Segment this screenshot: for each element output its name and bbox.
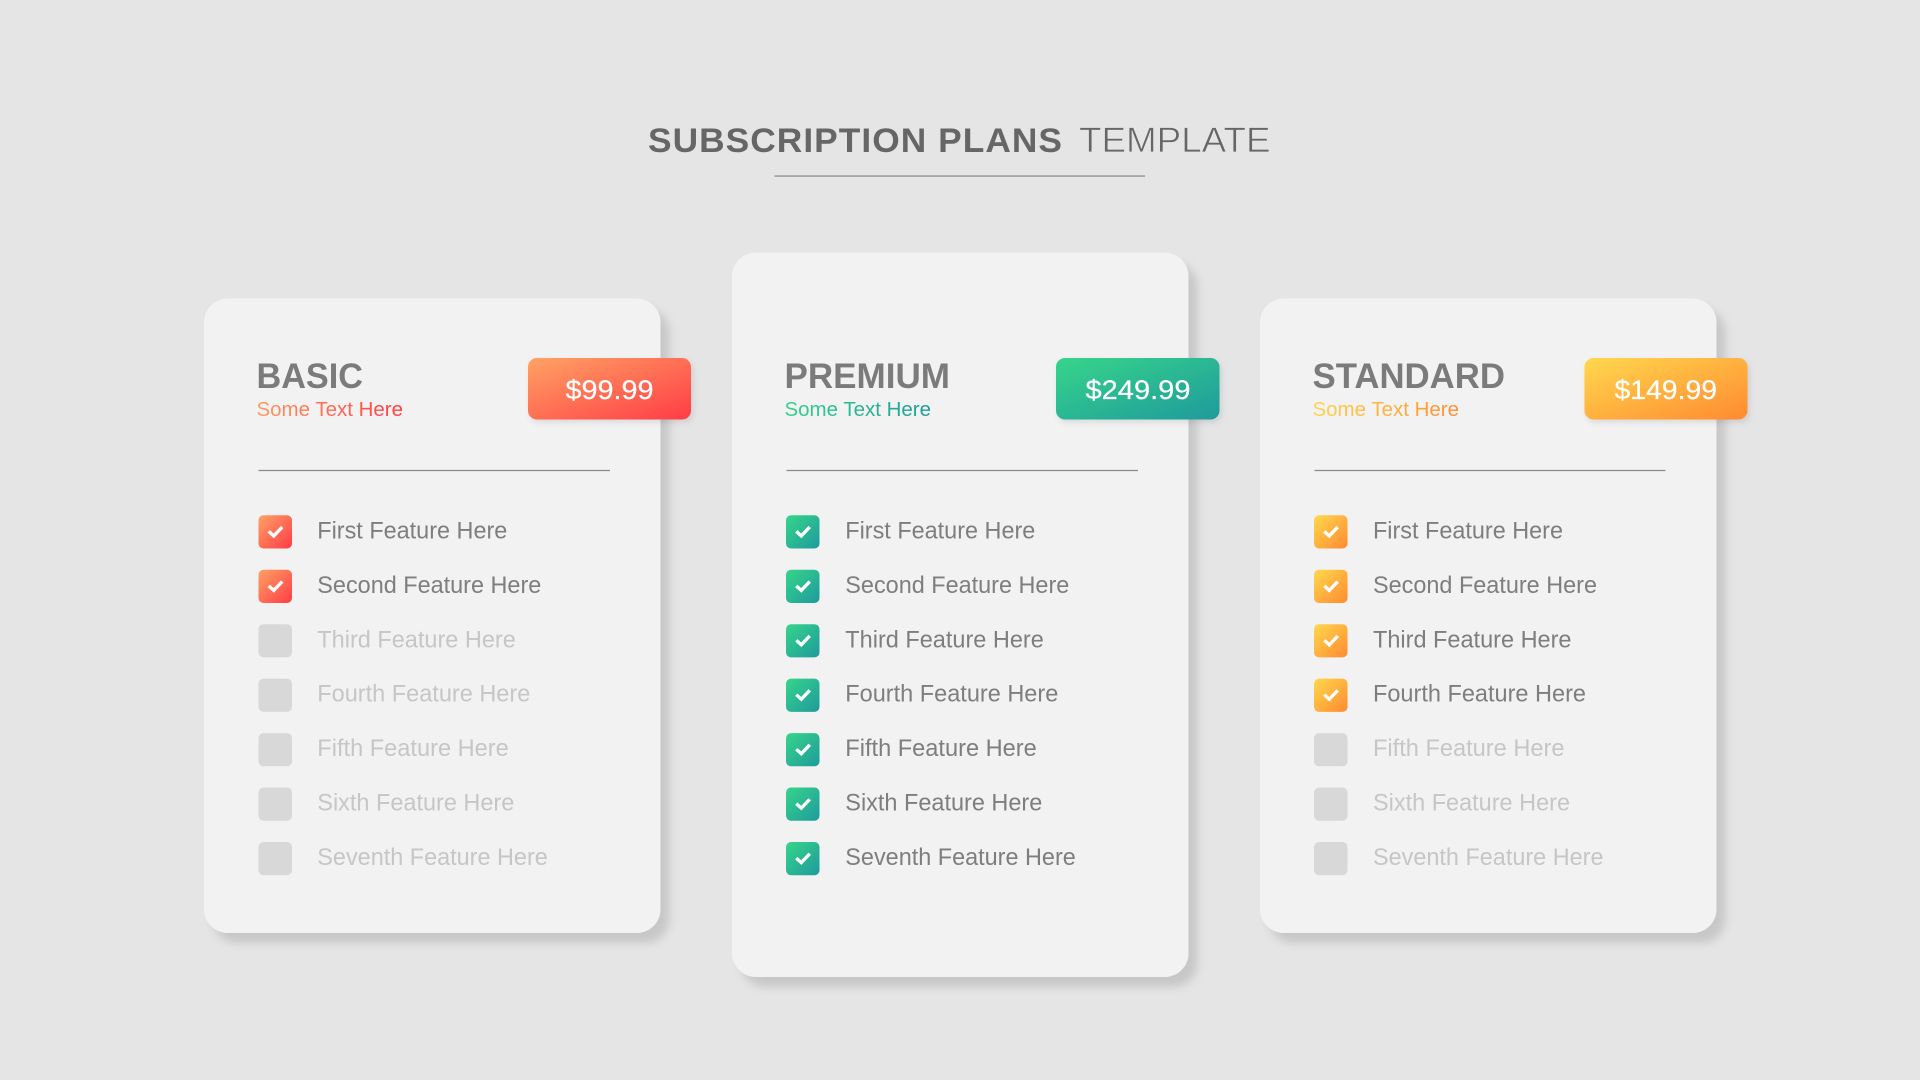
plan name: STANDARD — [1312, 357, 1505, 396]
plan name: PREMIUM — [784, 357, 950, 396]
plan subtitle: Some Text Here — [1312, 398, 1459, 421]
feature row: sixth: Sixth Feature Here — [317, 790, 514, 816]
feature row: seventh — [258, 842, 548, 875]
feature row: second — [1314, 570, 1597, 603]
title — [648, 121, 1270, 160]
feature row: sixth — [786, 788, 1042, 821]
feature row: fifth — [258, 733, 509, 766]
plan subtitle: Some Text Here — [256, 398, 403, 421]
feature row: fourth: Fourth Feature Here — [1373, 681, 1586, 708]
feature row: sixth: Sixth Feature Here — [845, 790, 1042, 816]
feature row: seventh — [1314, 842, 1604, 875]
feature row: third — [258, 624, 516, 657]
feature row: second — [258, 570, 541, 603]
feature row: seventh: Seventh Feature Here — [317, 844, 548, 871]
feature row: fourth — [786, 679, 1058, 712]
plan subtitle: Some Text Here — [784, 398, 931, 421]
card background — [1260, 298, 1716, 933]
feature row: second: Second Feature Here — [845, 572, 1069, 599]
feature row: fifth — [786, 733, 1037, 766]
card background — [204, 298, 660, 933]
feature row: fifth: Fifth Feature Here — [317, 735, 509, 762]
feature row: first — [1314, 515, 1563, 548]
title underline — [774, 175, 1145, 177]
feature row: second: Second Feature Here — [1373, 572, 1597, 599]
feature row: third: Third Feature Here — [317, 626, 516, 653]
feature row: fourth — [1314, 679, 1586, 712]
feature row: fourth — [258, 679, 530, 712]
feature row: fourth: Fourth Feature Here — [317, 681, 530, 708]
feature row: sixth — [258, 788, 514, 821]
title: TEMPLATE — [1079, 121, 1270, 160]
feature row: seventh: Seventh Feature Here — [845, 844, 1076, 871]
feature row: fifth: Fifth Feature Here — [845, 735, 1037, 762]
panel: standard plan — [1260, 298, 1748, 933]
feature row: first: First Feature Here — [1373, 518, 1563, 544]
feature row: first — [258, 515, 507, 548]
price badge: $249.99 — [1086, 375, 1190, 405]
feature row: third: Third Feature Here — [1373, 626, 1572, 653]
feature row: fourth: Fourth Feature Here — [845, 681, 1058, 708]
price badge: $149.99 — [1614, 375, 1717, 405]
panel: premium plan — [732, 252, 1220, 977]
feature row: seventh — [786, 842, 1076, 875]
feature row: first: First Feature Here — [845, 518, 1035, 544]
price badge: $99.99 — [566, 375, 654, 405]
feature row: fifth: Fifth Feature Here — [1373, 735, 1564, 762]
feature row: second: Second Feature Here — [317, 572, 541, 599]
feature row: third — [1314, 624, 1572, 657]
feature row: seventh: Seventh Feature Here — [1373, 844, 1604, 871]
feature row: sixth — [1314, 788, 1570, 821]
price badge — [528, 358, 691, 420]
price badge — [1056, 358, 1220, 420]
feature row: second — [786, 570, 1069, 603]
feature row: fifth — [1314, 733, 1564, 766]
feature row: first — [786, 515, 1035, 548]
feature row: third: Third Feature Here — [845, 626, 1044, 653]
panel: basic plan — [204, 298, 691, 933]
card background — [732, 252, 1188, 977]
price badge — [1584, 358, 1748, 420]
feature row: sixth: Sixth Feature Here — [1373, 790, 1570, 816]
feature row: first: First Feature Here — [317, 518, 507, 544]
plan name: BASIC — [256, 357, 363, 396]
title: SUBSCRIPTION PLANS — [648, 122, 1063, 160]
feature row: third — [786, 624, 1044, 657]
